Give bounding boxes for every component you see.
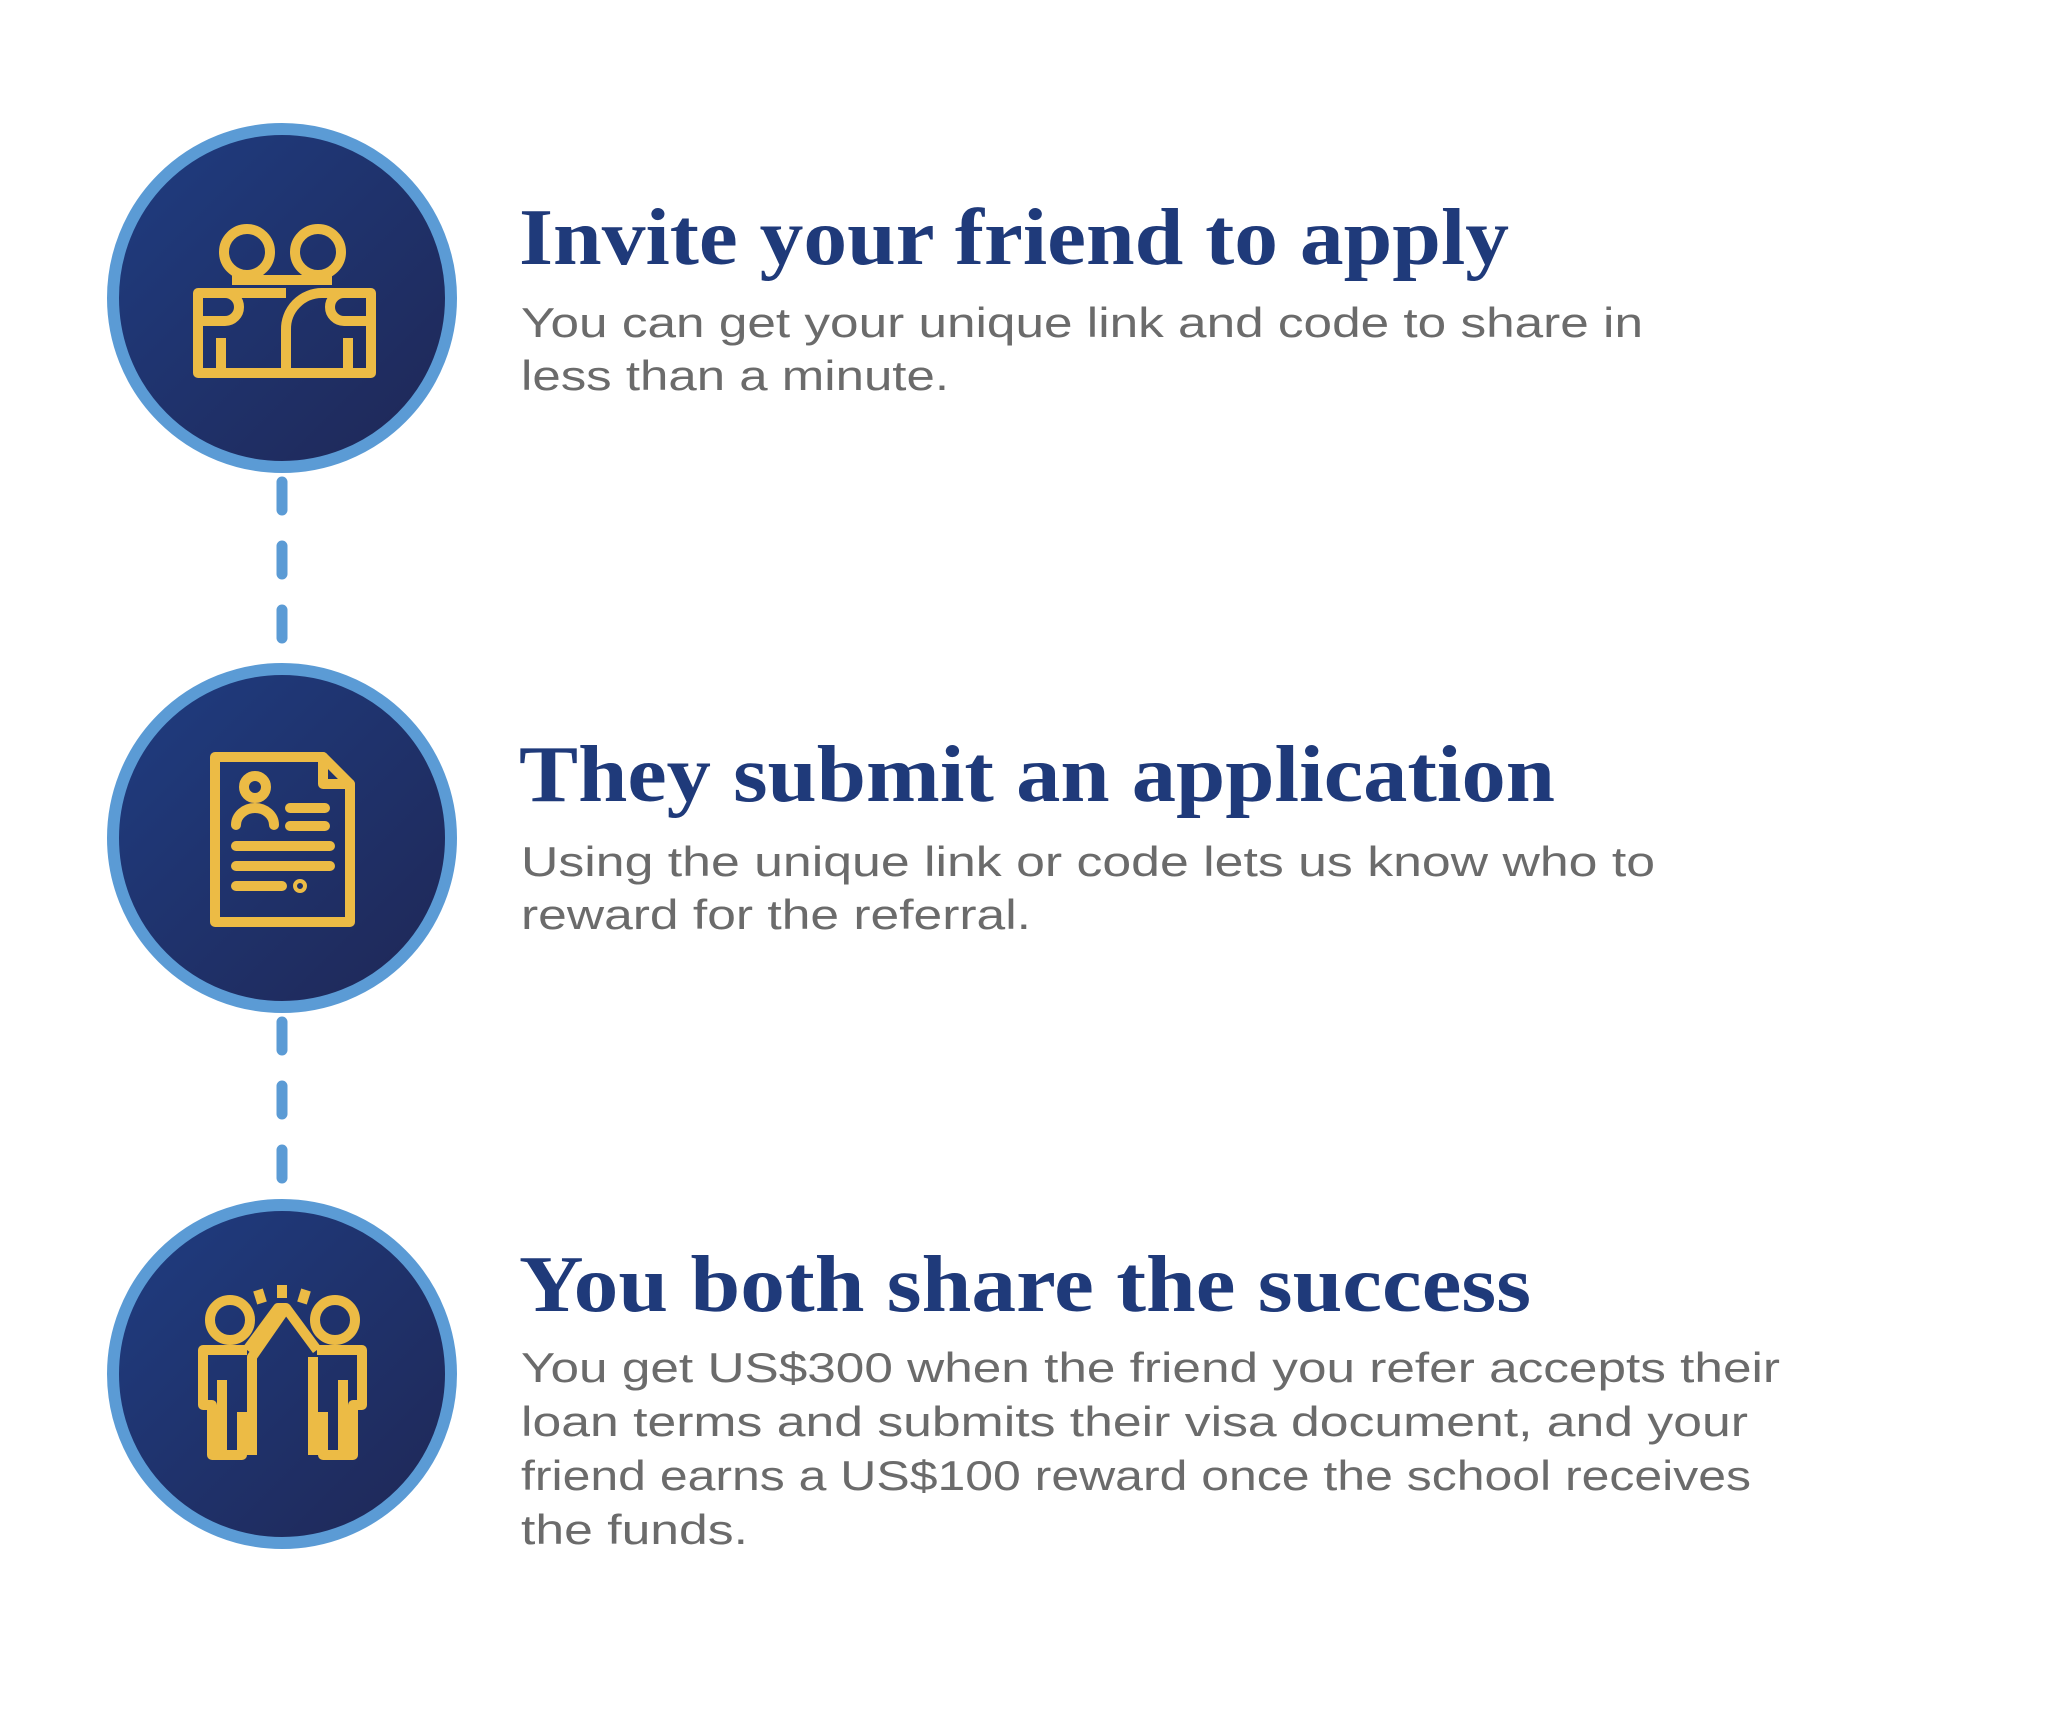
step 2 body xyxy=(521,838,1655,938)
step 2 title: They submit an application xyxy=(519,731,1555,819)
step 3 body: friend earns a US$100 reward once the school receives xyxy=(521,1452,1751,1499)
step 3 circle with high-five icon xyxy=(113,1205,451,1543)
connector dashes xyxy=(276,482,288,1196)
step 2 body: Using the unique link or code lets us know who to xyxy=(521,838,1655,885)
step 3 body: the funds. xyxy=(521,1506,748,1553)
step 1 body: You can get your unique link and code to share in xyxy=(521,299,1643,346)
step 3 body: loan terms and submits their visa document, and your xyxy=(521,1398,1748,1445)
step 3 body xyxy=(521,1344,1780,1553)
step 3 body: You get US$300 when the friend you refer accepts their xyxy=(521,1344,1780,1391)
step 2 body: reward for the referral. xyxy=(521,891,1031,938)
step 1 body xyxy=(521,299,1643,399)
step 2 circle with application icon xyxy=(113,669,451,1007)
step 3 title: You both share the success xyxy=(519,1241,1531,1329)
step 1 circle with friends icon xyxy=(113,129,451,467)
step 1 title: Invite your friend to apply xyxy=(519,194,1509,282)
step 1 body: less than a minute. xyxy=(521,352,949,399)
